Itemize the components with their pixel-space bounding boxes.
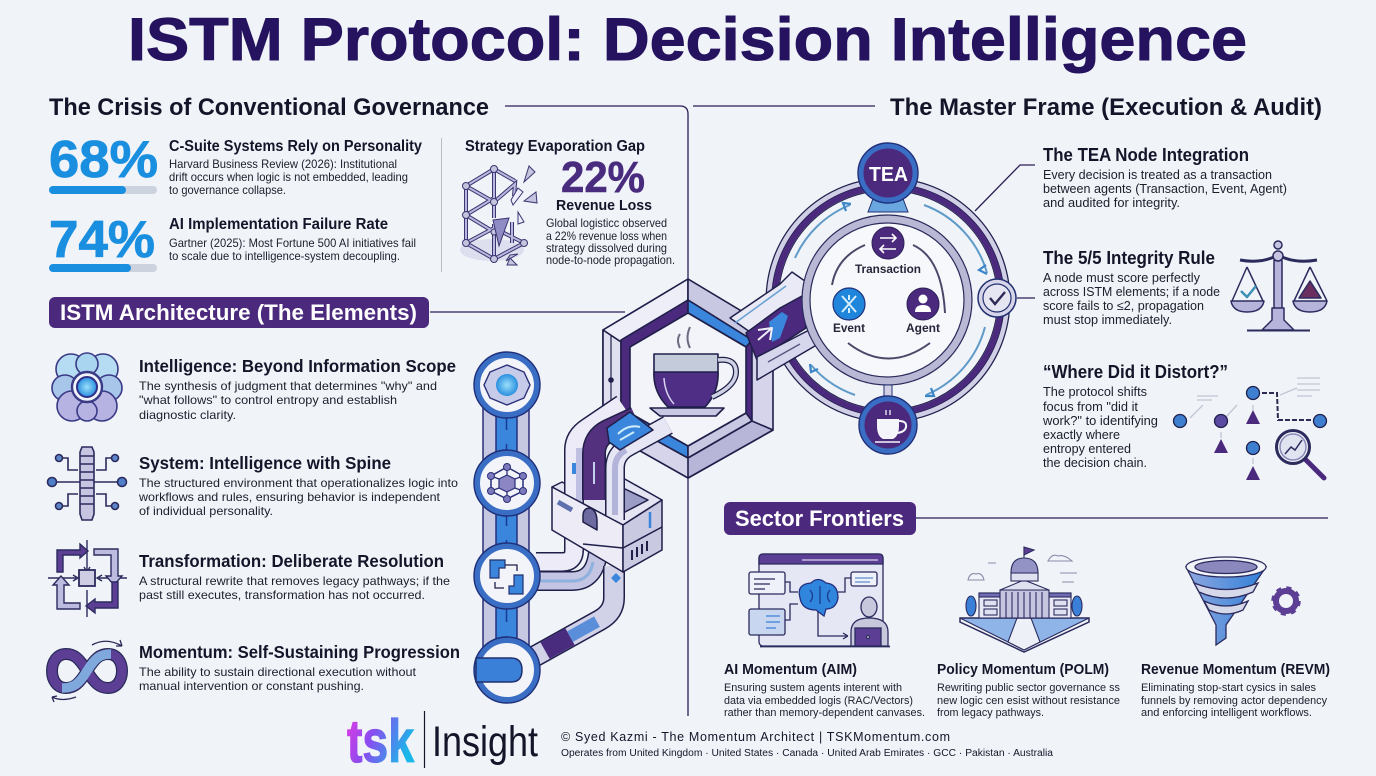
master frame inner ring: [795, 143, 1016, 454]
block: where did it distort: “Where Did it Distort?”: [1043, 362, 1228, 382]
node: event: [833, 288, 865, 335]
panel: sector frontiers: [724, 502, 1330, 719]
element: intelligence: diagnostic clarity.: [139, 408, 236, 422]
stat: 68 percent: to governance collapse.: [169, 183, 286, 197]
node: TEA: TEA: [869, 164, 908, 186]
block: TEA node integration: The TEA Node Integration: [1043, 145, 1249, 165]
pipe: lower elbow: [536, 552, 598, 581]
icon: policy capitol: [960, 547, 1089, 652]
node: transaction: [855, 227, 921, 276]
node: agent: [906, 288, 940, 335]
block: where did it distort: work?" to identifying: [1042, 414, 1158, 428]
pipe: right light return: [615, 425, 668, 520]
block: where did it distort: [1042, 362, 1228, 470]
tea cup: [650, 327, 736, 416]
panel: crisis of conventional governance: [49, 94, 675, 272]
block: where did it distort: the decision chain.: [1043, 456, 1147, 470]
element: transformation: [139, 551, 450, 602]
block: integrity rule: across ISTM elements; if a node: [1043, 285, 1220, 299]
sector: revenue momentum: Revenue Momentum (REVM): [1141, 661, 1330, 678]
icon: infinity: [52, 640, 122, 702]
locations line: Operates from United Kingdom · United States · Canada · United Arab Emirates · GCC · Pakistan · Australia: [561, 748, 1053, 759]
sector: policy momentum: [937, 661, 1120, 719]
stat: 74 percent: to scale due to intelligence-system decoupling.: [169, 249, 400, 263]
pipe: purple core: [594, 418, 636, 500]
sector: policy momentum: new logic cen esist without resistance: [937, 695, 1120, 707]
block: TEA node integration: Every decision is treated as a transaction: [1043, 168, 1272, 182]
element: transformation: Transformation: Deliberate Resolution: [139, 551, 444, 571]
junction box rear: [552, 478, 662, 525]
copyright line: © Syed Kazmi - The Momentum Architect | TSKMomentum.com: [561, 730, 950, 744]
logo: tsk: tsk: [347, 708, 414, 775]
sector: revenue momentum: [1141, 661, 1330, 719]
element: system: [138, 453, 458, 518]
stat: 68 percent: C-Suite Systems Rely on Personality: [169, 138, 422, 155]
element: system: workflows and rules, ensuring behavior is independent: [138, 490, 441, 504]
panel: ISTM architecture: [48, 297, 460, 702]
sector: AI momentum: [724, 661, 925, 719]
node: system: [474, 450, 540, 516]
heading: master frame: The Master Frame (Execution & Audit): [890, 94, 1322, 121]
stat: 68 percent: 68%: [49, 131, 158, 189]
sector: policy momentum: from legacy pathways.: [937, 707, 1044, 719]
node: agent: Agent: [906, 323, 940, 335]
element: intelligence: "what follows" to control entropy and establish: [139, 393, 397, 407]
sector: revenue momentum: and enforcing intelligent workflows.: [1141, 707, 1312, 719]
element: transformation: past still executes, transformation has not occurred.: [139, 588, 425, 602]
stat: 74 percent: Gartner (2025): Most Fortune 500 AI initiatives fail: [169, 236, 416, 250]
element: system: of individual personality.: [139, 504, 273, 518]
block: integrity rule: [1043, 248, 1220, 327]
block: where did it distort: entropy entered: [1043, 442, 1131, 456]
element: momentum: [139, 642, 460, 693]
junction box front: [552, 487, 662, 582]
sector: AI momentum: AI Momentum (AIM): [724, 661, 857, 678]
strategy evaporation gap block: Global logisticc observed: [546, 216, 667, 230]
strategy evaporation gap block: strategy dissolved during: [546, 241, 667, 255]
element: transformation: A structural rewrite that removes legacy pathways; if the: [139, 574, 450, 588]
strategy evaporation gap block: Revenue Loss: [556, 197, 652, 214]
element: intelligence: Intelligence: Beyond Information Scope: [139, 356, 456, 376]
stat: 68 percent: drift occurs when logic is not embedded, leading: [169, 170, 408, 184]
element: system: System: Intelligence with Spine: [139, 453, 391, 473]
logo: Insight: Insight: [432, 718, 538, 766]
blue leaf on hexagon: [607, 412, 653, 450]
section connector lines: [430, 106, 1328, 716]
node: TEA: [858, 143, 918, 212]
spine nodes: [474, 352, 540, 703]
stat: 68 percent: Harvard Business Review (2026): Institutional: [169, 157, 397, 171]
panel: master frame: [890, 94, 1327, 480]
icon: scales: [1231, 241, 1327, 330]
inner arcs: [832, 245, 945, 358]
block: integrity rule: The 5/5 Integrity Rule: [1043, 248, 1215, 268]
icon: gear: [1273, 588, 1299, 614]
element: momentum: The ability to sustain directional execution without: [139, 665, 417, 679]
sector: AI momentum: rather than memory-dependent canvases.: [724, 707, 925, 719]
element: system: The structured environment that operationalizes logic into: [139, 476, 458, 490]
footer: [347, 708, 1053, 775]
icon: brain: [52, 353, 122, 421]
flow arrows: [795, 203, 987, 396]
title: ISTM Protocol: Decision Intelligence: [128, 6, 1247, 73]
stat: 74 percent: 74%: [49, 211, 155, 269]
node: cup: [859, 385, 917, 454]
stat: 74 percent: [49, 211, 416, 272]
sector: AI momentum: data via embedded logis (RAC/Vectors): [724, 695, 913, 707]
block: TEA node integration: and audited for integrity.: [1043, 196, 1180, 210]
node: transformation: [474, 543, 540, 609]
sector: AI momentum: Ensuring sustem agents interent with: [724, 682, 902, 694]
pipe: third node to hexagon: [536, 404, 622, 562]
spine rail: [483, 388, 529, 670]
stat: 74 percent: AI Implementation Failure Rate: [169, 216, 388, 233]
sector: revenue momentum: funnels by removing actor dependency: [1141, 695, 1327, 707]
icon: distortion trace: [1174, 378, 1326, 480]
icon: spine: [48, 447, 126, 520]
block: where did it distort: exactly where: [1043, 428, 1120, 442]
inner circle: [806, 219, 968, 381]
sector: policy momentum: Rewriting public sector governance ss: [937, 682, 1120, 694]
sector: revenue momentum: Eliminating stop-start cysics in sales: [1141, 682, 1316, 694]
node: intelligence: [474, 352, 540, 418]
element: momentum: Momentum: Self-Sustaining Progression: [139, 642, 460, 662]
strategy evaporation gap block: Strategy Evaporation Gap: [465, 138, 645, 155]
block: integrity rule: A node must score perfectly: [1043, 271, 1201, 285]
outer ring: [769, 181, 1007, 419]
block: integrity rule: must stop immediately.: [1043, 313, 1172, 327]
sector: policy momentum: Policy Momentum (POLM): [937, 661, 1109, 678]
strategy evaporation gap block: node-to-node propagation.: [546, 253, 675, 267]
badge: architecture heading: ISTM Architecture (The Elements): [60, 300, 417, 325]
icon: AI momentum: [749, 554, 890, 646]
strategy evaporation gap block: a 22% revenue loss when: [546, 229, 667, 243]
node: event: Event: [833, 323, 865, 335]
block: where did it distort: The protocol shifts: [1043, 385, 1147, 399]
heading: crisis: The Crisis of Conventional Governance: [49, 94, 489, 121]
element: intelligence: [139, 356, 456, 422]
icon: transformation arrows: [48, 540, 127, 617]
hexagon body: [603, 279, 773, 478]
badge: sector frontiers: Sector Frontiers: [735, 506, 904, 531]
connectors: hexagon to ring: [730, 272, 820, 380]
strategy evaporation gap block: [465, 138, 675, 267]
node: momentum: [474, 637, 540, 703]
block: integrity rule: score fails to ≤2, propagation: [1043, 299, 1204, 313]
node: check: [978, 279, 1016, 317]
element: intelligence: The synthesis of judgment that determines "why" and: [139, 379, 437, 393]
block: TEA node integration: [1043, 145, 1287, 210]
strategy evaporation gap block: 22%: [561, 153, 645, 202]
badge: sector frontiers: [724, 502, 916, 535]
icon: broken cage: [460, 166, 537, 265]
isometric pipe network: [530, 404, 668, 659]
icon: revenue funnel: [1186, 557, 1266, 645]
node: transaction: Transaction: [855, 264, 921, 276]
pipe: bottom to box: [530, 566, 614, 659]
stat: 68 percent: [49, 131, 422, 197]
block: where did it distort: focus from "did it: [1043, 400, 1139, 414]
block: TEA node integration: between agents (Transaction, Event, Agent): [1043, 182, 1287, 196]
element: momentum: manual intervention or constant pushing.: [139, 679, 364, 693]
